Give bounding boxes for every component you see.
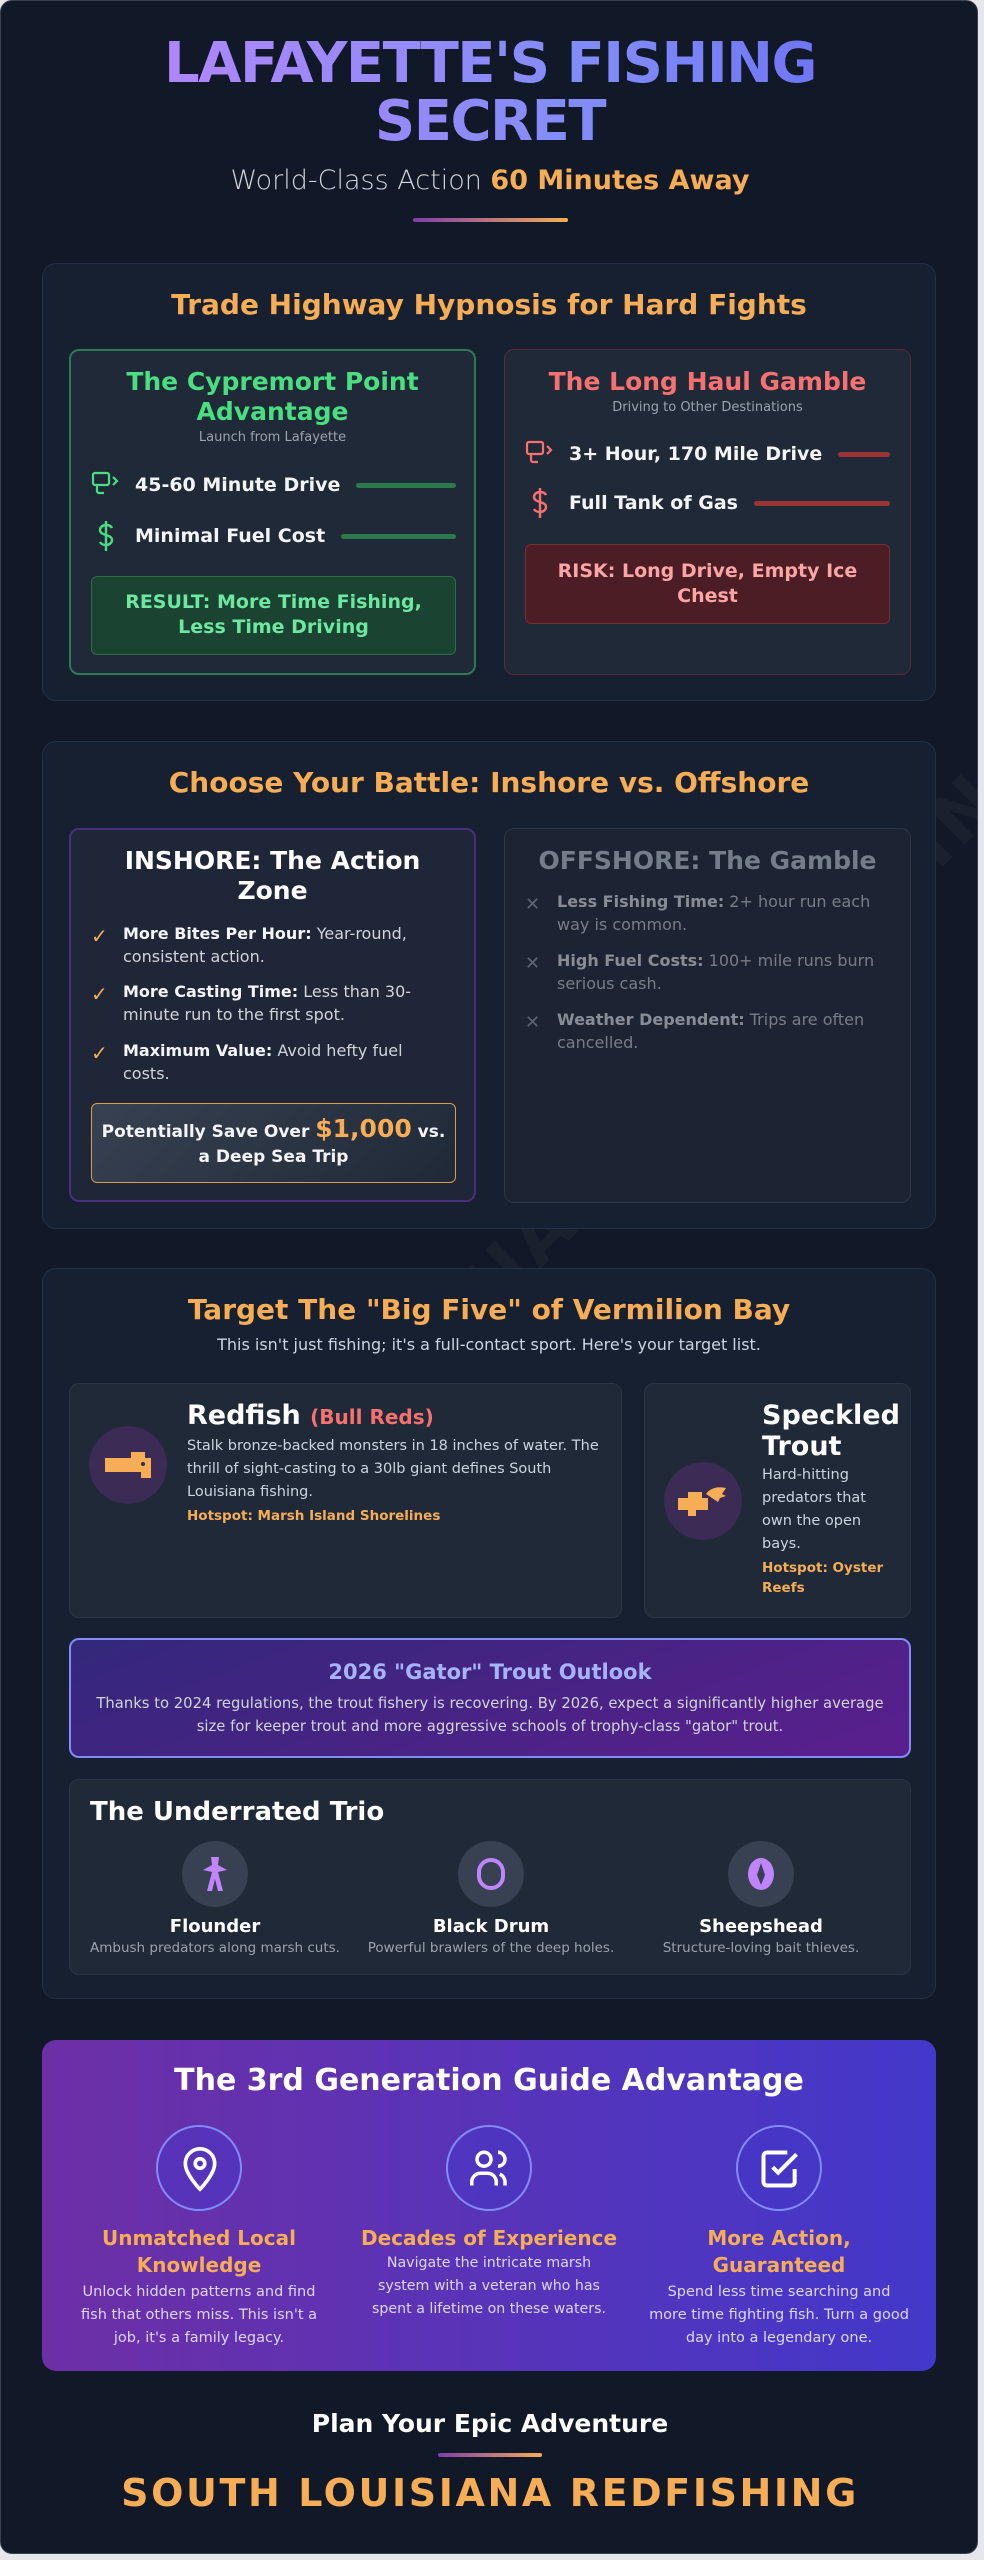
row: full tank: Full Tank of Gas	[569, 492, 738, 514]
row: drive time: 45-60 Minute Drive	[135, 474, 340, 496]
row: fuel: Minimal Fuel Cost	[135, 525, 325, 547]
panel: inshore: More Bites Per Hour: Year-round, consistent action.	[123, 924, 407, 966]
subtitle: World-Class Action 60 Minutes Away	[231, 165, 749, 196]
panel: underrated trio	[69, 1779, 911, 1975]
panel: inshore: Maximum Value: Avoid hefty fuel costs.	[123, 1041, 403, 1083]
savings callout: Potentially Save Over $1,000 vs.	[102, 1114, 445, 1143]
trio item: sheepshead: Structure-loving bait thieves.	[663, 1940, 859, 1956]
footer heading: Plan Your Epic Adventure	[312, 2409, 668, 2438]
risk callout	[525, 544, 890, 624]
card: speckled trout: Speckled	[762, 1400, 900, 1431]
trio item: sheepshead	[663, 1841, 859, 1956]
card: speckled trout: Hotspot: Oyster Reefs	[762, 1560, 883, 1596]
panel: offshore: High Fuel Costs: 100+ mile runs burn serious cash.	[557, 951, 874, 993]
trio item: black drum	[368, 1841, 614, 1956]
panel: underrated trio: The Underrated Trio	[90, 1797, 384, 1827]
callout: gator trout	[69, 1638, 911, 1758]
panel: long haul	[504, 349, 911, 675]
panel: offshore: ✕	[525, 1012, 540, 1033]
savings callout	[91, 1103, 456, 1183]
result callout: Less Time Driving	[178, 616, 369, 638]
panel: inshore: Zone	[237, 876, 308, 905]
panel: offshore	[504, 828, 911, 1203]
result callout	[91, 576, 456, 655]
panel: offshore: ✕	[525, 894, 540, 915]
feature: local knowledge: Knowledge	[137, 2253, 261, 2277]
row: long drive	[526, 440, 890, 465]
trio item: black drum: Powerful brawlers of the deep holes.	[368, 1940, 614, 1956]
icon: trout	[664, 1462, 742, 1540]
feature: more action: More Action,	[707, 2226, 851, 2250]
panel: cypremort advantage: Advantage	[197, 397, 348, 426]
title: SECRET	[375, 89, 605, 154]
feature: experience: Navigate the intricate marsh system with a veteran who has spent a lifetime on these waters.	[372, 2255, 606, 2317]
row: drive time	[92, 472, 456, 496]
card: redfish: Redfish (Bull Reds)	[187, 1400, 434, 1431]
savings callout: a Deep Sea Trip	[199, 1147, 348, 1167]
trio item: sheepshead: Sheepshead	[699, 1916, 823, 1937]
panel: inshore: INSHORE: The Action	[125, 846, 420, 875]
feature: more action: Spend less time searching and more time fighting fish. Turn a good day into a legendary one.	[649, 2284, 909, 2346]
panel: offshore: ✕	[525, 953, 540, 974]
heading: The 3rd Generation Guide Advantage	[174, 2063, 804, 2098]
panel: offshore: Weather Dependent: Trips are often cancelled.	[557, 1010, 864, 1052]
trio item: flounder	[90, 1841, 340, 1956]
feature: local knowledge: Unmatched Local	[102, 2226, 296, 2250]
feature: more action: Guaranteed	[713, 2253, 845, 2277]
card: speckled trout: Hard-hitting predators that own the open bays.	[762, 1467, 866, 1552]
feature: more action	[649, 2125, 909, 2346]
trio item: black drum: Black Drum	[433, 1916, 549, 1937]
panel: offshore: OFFSHORE: The Gamble	[538, 846, 876, 875]
result callout: RESULT: More Time Fishing,	[125, 591, 422, 613]
feature: experience	[361, 2125, 617, 2317]
panel: inshore: ✓	[91, 1041, 108, 1065]
title	[1, 35, 979, 151]
heading: Trade Highway Hypnosis for Hard Fights	[171, 288, 807, 321]
panel: guide advantage	[42, 2040, 936, 2371]
heading: Target The "Big Five" of Vermilion Bay	[188, 1293, 790, 1326]
row: fuel	[98, 521, 456, 551]
panel: cypremort advantage: Launch from Lafayette	[199, 430, 346, 445]
panel: long haul: The Long Haul Gamble	[549, 367, 866, 396]
panel: inshore: More Casting Time: Less than 30-minute run to the first spot.	[123, 982, 411, 1024]
icon: redfish	[89, 1426, 167, 1504]
panel: big five: This isn't just fishing; it's a full-contact sport. Here's your target list.	[217, 1335, 761, 1354]
risk callout: RISK: Long Drive, Empty Ice	[558, 560, 857, 582]
card: redfish: Hotspot: Marsh Island Shorelines	[187, 1508, 440, 1524]
callout: gator trout: Thanks to 2024 regulations, the trout fishery is recovering. By 2026, expect a significantly higher average size for keeper trout and more aggressive schools of trophy-class "gator" trout.	[96, 1695, 884, 1735]
panel: offshore: Less Fishing Time: 2+ hour run each way is common.	[557, 892, 870, 934]
feature: local knowledge: Unlock hidden patterns and find fish that others miss. This isn't a job, it's a family legacy.	[81, 2284, 317, 2346]
footer brand: SOUTH LOUISIANA REDFISHING	[121, 2471, 859, 2515]
bullet list	[525, 892, 874, 1052]
row: full tank	[532, 488, 890, 518]
trio item: flounder: Ambush predators along marsh cuts.	[90, 1940, 340, 1956]
card: speckled trout: Trout	[762, 1431, 841, 1462]
bullet list	[91, 924, 411, 1083]
card: redfish	[69, 1383, 622, 1618]
panel: big five	[42, 1268, 936, 1999]
callout: gator trout: 2026 "Gator" Trout Outlook	[328, 1660, 652, 1684]
panel: cypremort advantage	[69, 349, 476, 675]
panel: long haul: Driving to Other Destinations	[612, 400, 803, 415]
panel: cypremort advantage: The Cypremort Point	[126, 367, 419, 396]
panel: inshore: ✓	[91, 982, 108, 1006]
trio item: flounder: Flounder	[170, 1916, 260, 1937]
risk callout: Chest	[677, 585, 738, 607]
panel: inshore: ✓	[91, 924, 108, 948]
card: speckled trout	[644, 1383, 911, 1618]
feature: experience: Decades of Experience	[361, 2226, 617, 2250]
card: redfish: Stalk bronze-backed monsters in 18 inches of water. The thrill of sight-casting to a 30lb giant defines South Louisiana fishing.	[187, 1438, 599, 1500]
panel: drive comparison	[42, 263, 936, 701]
feature: local knowledge	[81, 2125, 317, 2346]
heading: Choose Your Battle: Inshore vs. Offshore	[169, 766, 809, 799]
title: LAFAYETTE'S FISHING	[164, 31, 816, 96]
panel: inshore vs offshore	[42, 741, 936, 1229]
panel: inshore	[69, 828, 476, 1202]
row: long drive: 3+ Hour, 170 Mile Drive	[569, 443, 822, 465]
